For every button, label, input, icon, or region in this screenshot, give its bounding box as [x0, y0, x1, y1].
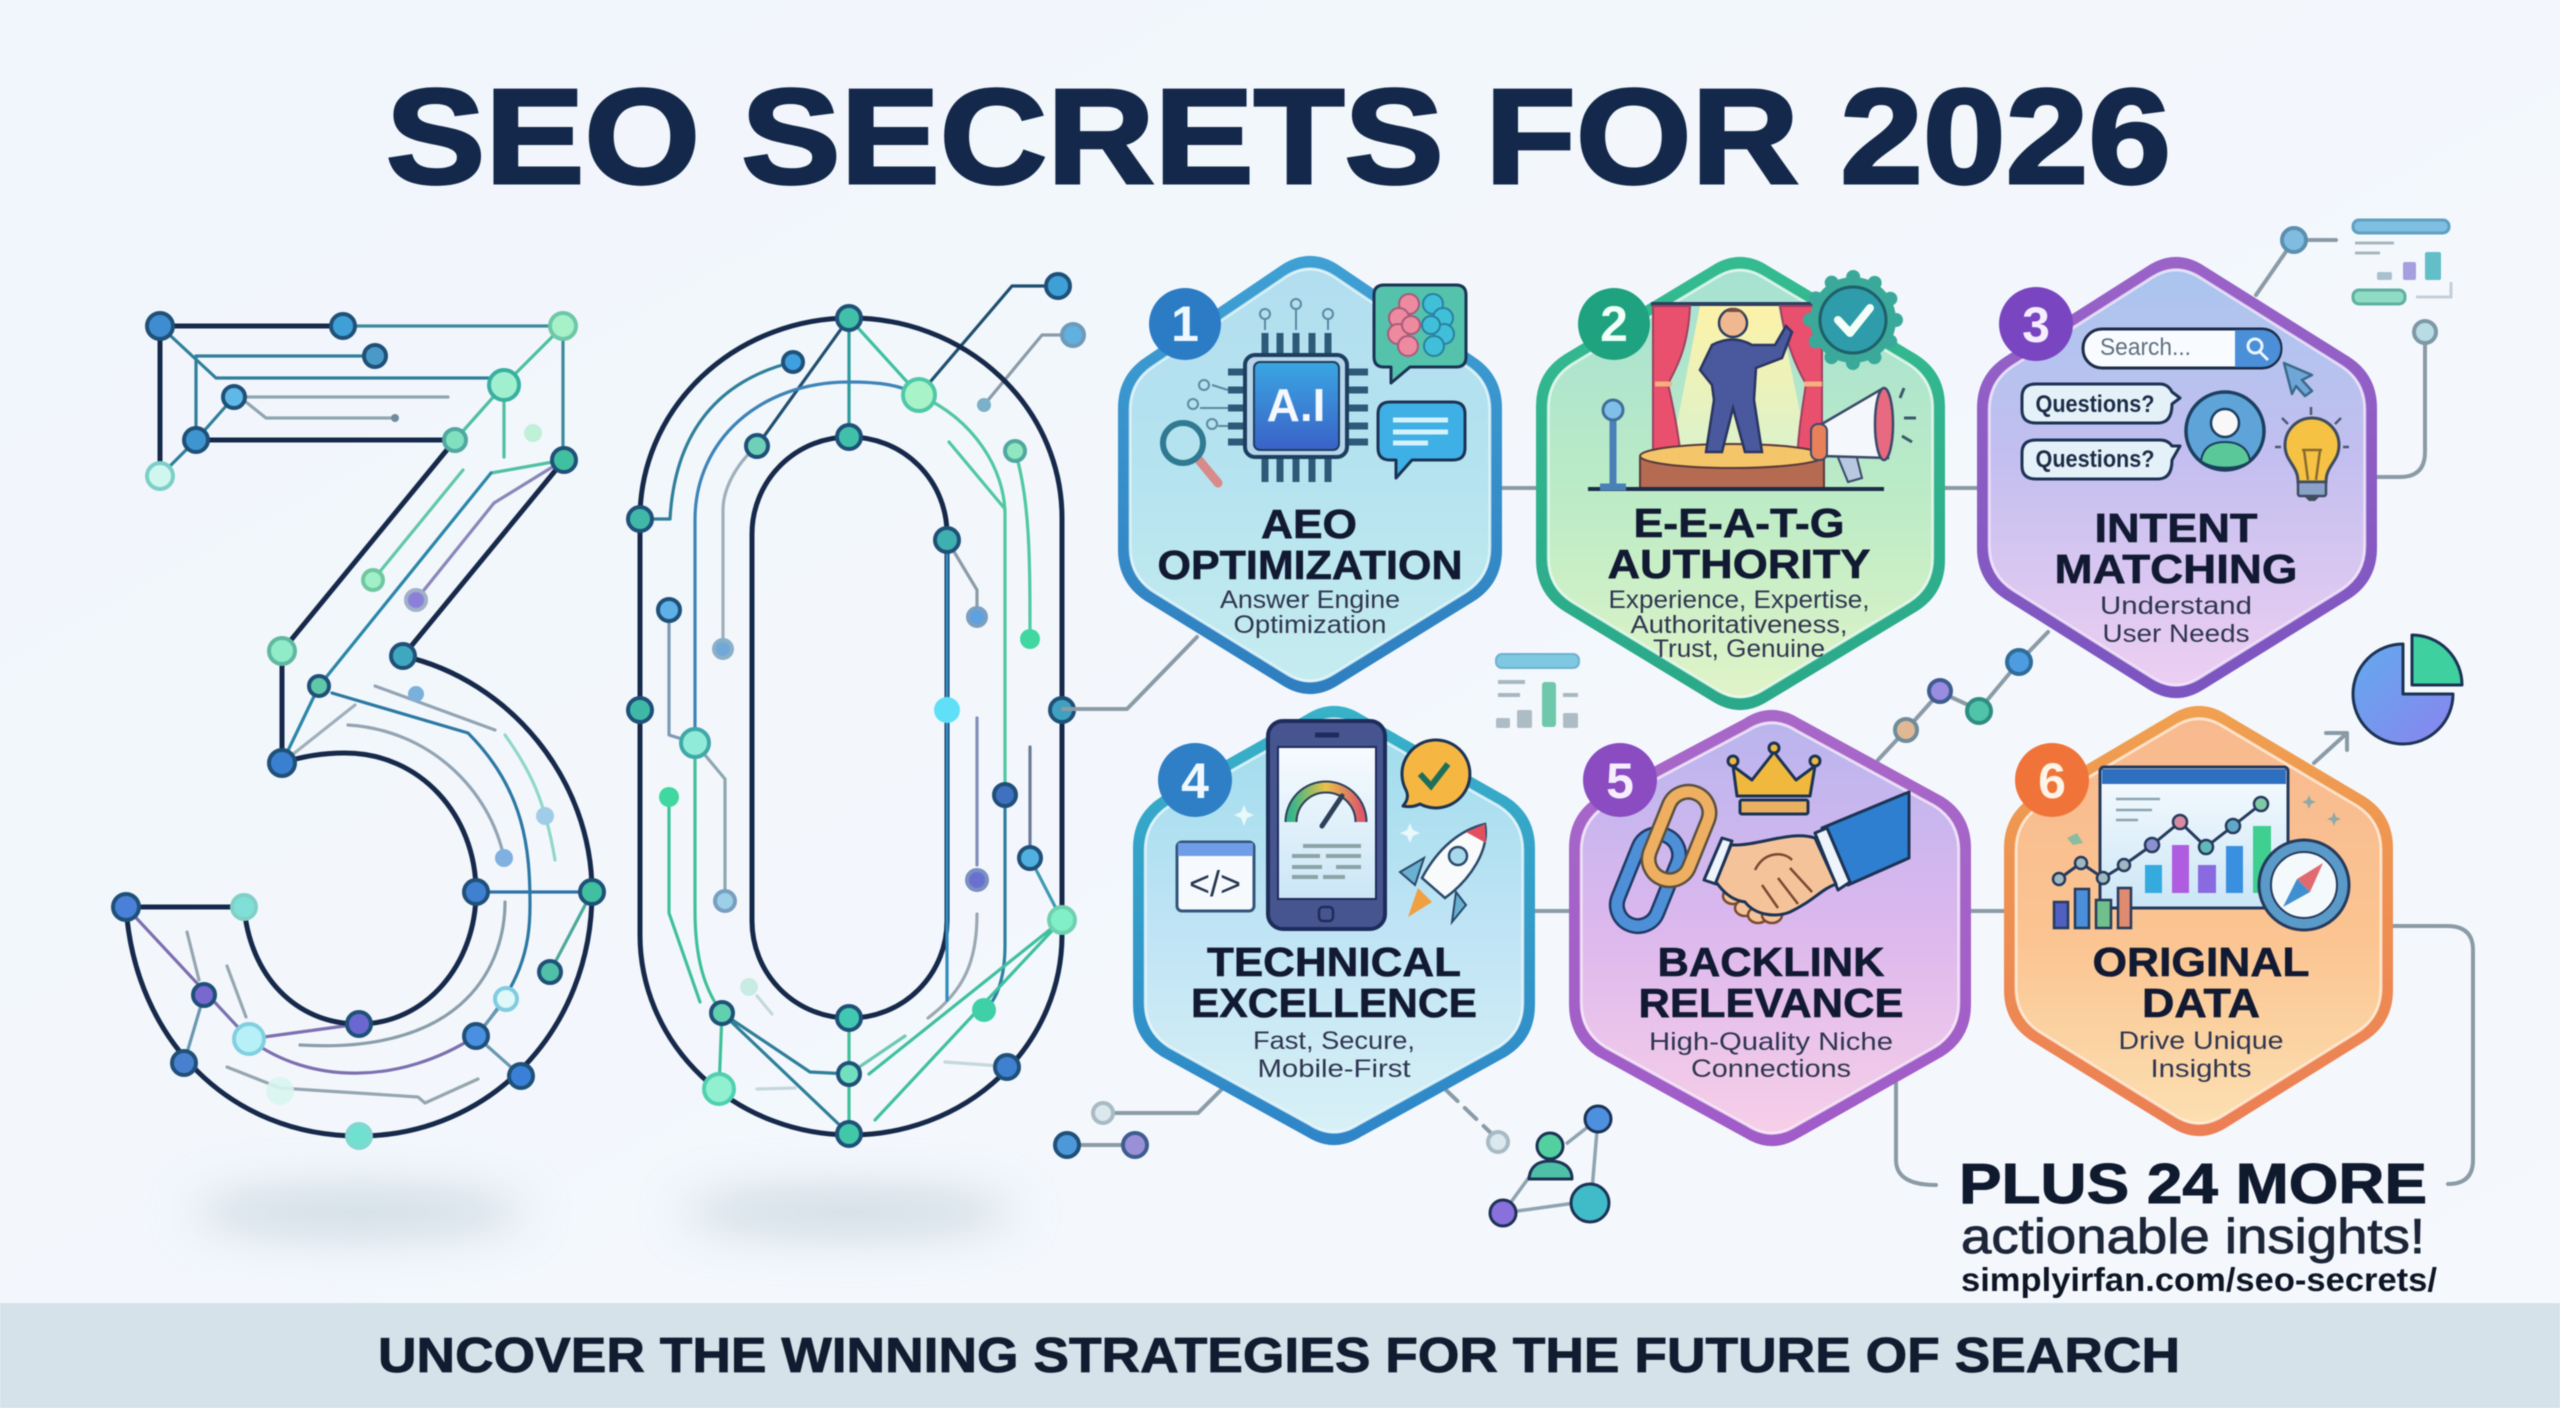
- digit 0 inner right accent: [945, 540, 949, 1000]
- description: Drive Unique: [2118, 1027, 2284, 1055]
- hexagon frame: [1983, 263, 2371, 692]
- description: [1253, 1027, 1415, 1083]
- description: Fast, Secure,: [1253, 1027, 1415, 1055]
- badge 4: 4: [1181, 753, 1209, 809]
- description: Experience, Expertise,: [1608, 586, 1870, 614]
- circuit digit 0: [628, 274, 1084, 1146]
- hexagon frame: [1139, 712, 1529, 1139]
- icon: check bubble: [1402, 740, 1470, 808]
- badge 6: [2015, 743, 2089, 817]
- badge 6: 6: [2038, 753, 2066, 809]
- small connector nodes: [1055, 228, 2436, 1157]
- heading: AUTHORITY: [1608, 541, 1870, 587]
- panel: 1 AEO optimization: [1124, 262, 1496, 688]
- heading: INTENT: [2094, 505, 2258, 551]
- badge 5: [1583, 743, 1657, 817]
- heading: E-E-A-T-G: [1634, 500, 1844, 546]
- badge 5: 5: [1606, 753, 1634, 809]
- digit 0 nodes: [628, 274, 1084, 1146]
- question bubble 2: [2022, 440, 2180, 479]
- description: User Needs: [2102, 620, 2250, 648]
- description: High-Quality Niche: [1649, 1028, 1893, 1056]
- callout: plus 24 more: simplyirfan.com/seo-secrets/: [1961, 1261, 2437, 1298]
- arrow: to pie chart: [2314, 733, 2347, 763]
- panel: 6 original data: [2010, 712, 2387, 1130]
- badge 3: 3: [2022, 297, 2050, 353]
- description: Authoritativeness,: [1630, 611, 1848, 639]
- icon: small bar chart: [2054, 888, 2131, 928]
- icon: analytics window: [2100, 767, 2288, 908]
- digit 3 nodes: [113, 313, 604, 1148]
- hexagon frame: [1124, 262, 1496, 688]
- icon: check badge: [1810, 277, 1896, 363]
- digit 3 outline: [126, 326, 592, 1136]
- badge 1: 1: [1171, 296, 1199, 352]
- inner highlight: [1581, 723, 1959, 1133]
- icon: mini dashboard centre: [1496, 654, 1579, 728]
- panel: 4 technical excellence: [1139, 712, 1529, 1139]
- sparkles: [2302, 795, 2341, 826]
- heading: [1158, 501, 1462, 588]
- question bubble 1: Questions?: [2036, 391, 2154, 418]
- icon: brain bubble: [1374, 285, 1466, 383]
- circuit digit 3: [113, 313, 604, 1148]
- description: Trust, Genuine: [1653, 635, 1825, 663]
- icon: chain links: [1611, 785, 1716, 932]
- icon: code window: </>: [1189, 863, 1241, 904]
- icon: rocket: [1400, 824, 1486, 922]
- inner highlight: [1130, 269, 1490, 681]
- panel: 3 intent matching: [1983, 263, 2371, 692]
- icon: compass: [2259, 840, 2349, 930]
- inner highlight: [1989, 270, 2365, 685]
- digit 3 traces: [126, 326, 592, 1103]
- heading: OPTIMIZATION: [1158, 542, 1462, 588]
- icon: cursor: [2284, 363, 2312, 396]
- question bubble 1: [2022, 384, 2180, 423]
- description: Connections: [1691, 1055, 1851, 1083]
- hexagon frame: [2010, 712, 2387, 1130]
- description: Understand: [2100, 592, 2252, 620]
- connector lines: [1063, 240, 2473, 1185]
- title: SEO SECRETS FOR 2026: [386, 61, 2171, 212]
- description: Optimization: [1234, 611, 1386, 639]
- callout: plus 24 more: PLUS 24 MORE: [1959, 1152, 2427, 1216]
- icon: stage with speaker: [1588, 304, 1884, 489]
- heading: [2092, 939, 2310, 1026]
- inner highlight: [1548, 270, 1933, 697]
- badge 4: [1158, 743, 1232, 817]
- icon: megaphone: [1811, 388, 1916, 482]
- digit 3 upper right outline: [343, 326, 563, 460]
- icon: handshake: [1704, 792, 1909, 923]
- heading: RELEVANCE: [1638, 980, 1904, 1026]
- icon: pie chart: [2353, 635, 2462, 744]
- digit 0 outlines: [640, 318, 1062, 1135]
- search bar: [2083, 329, 2281, 368]
- description: [2100, 592, 2252, 648]
- panel: 2 E-E-A-T-G authority: [1542, 263, 1939, 704]
- icon: magnifier: [1163, 423, 1218, 483]
- line chart: [2053, 797, 2268, 885]
- heading: TECHNICAL: [1207, 939, 1461, 985]
- digit shadows: [189, 1188, 1019, 1236]
- heading: DATA: [2142, 980, 2260, 1026]
- heading: [1191, 939, 1477, 1026]
- description: Mobile-First: [1258, 1055, 1411, 1083]
- icon: light bulb: [2275, 407, 2349, 501]
- icon: user avatar: [2186, 392, 2264, 470]
- inner highlight: [2016, 719, 2381, 1123]
- description: [1608, 586, 1870, 663]
- heading: [2054, 505, 2298, 592]
- heading: EXCELLENCE: [1191, 980, 1477, 1026]
- callout: plus 24 more: [1959, 1152, 2437, 1298]
- hexagon frame: [1542, 263, 1939, 704]
- heading: [1608, 500, 1870, 587]
- heading: [1638, 939, 1904, 1026]
- icon: phone with speed gauge: [1268, 721, 1385, 929]
- heading: ORIGINAL: [2092, 939, 2310, 985]
- question bubble 2: Questions?: [2036, 446, 2154, 473]
- inner highlight: [1145, 719, 1523, 1132]
- icon: people network: [1490, 1106, 1611, 1226]
- description: [1220, 586, 1400, 639]
- icon: AI chip: [1188, 299, 1368, 482]
- hexagon frame: [1575, 716, 1965, 1140]
- description: Insights: [2150, 1055, 2252, 1083]
- search bar: Search...: [2100, 334, 2191, 361]
- badge 2: [1578, 288, 1650, 360]
- icon: mini dashboard top right: [2353, 220, 2451, 304]
- heading: AEO: [1261, 501, 1357, 547]
- badge 1: [1149, 288, 1221, 360]
- digit 0 traces: [640, 286, 1073, 1134]
- icon: code window: [1177, 842, 1254, 911]
- decorative dots: [2067, 833, 2083, 845]
- description: [2118, 1027, 2284, 1083]
- heading: BACKLINK: [1658, 939, 1885, 985]
- footer band: UNCOVER THE WINNING STRATEGIES FOR THE FUTURE OF SEARCH: [378, 1329, 2180, 1383]
- badge 3: [1999, 287, 2073, 361]
- description: [1649, 1028, 1893, 1083]
- footer band: [0, 1303, 2560, 1408]
- heading: MATCHING: [2054, 546, 2298, 592]
- icon: chat bubble: [1378, 402, 1465, 478]
- sparkles: [1234, 805, 1420, 843]
- description: Answer Engine: [1220, 586, 1400, 614]
- digit 0 inner outline: [752, 437, 947, 1018]
- badge 2: 2: [1600, 296, 1628, 352]
- icon: crown: [1728, 743, 1820, 814]
- callout: plus 24 more: actionable insights!: [1961, 1210, 2425, 1264]
- icon: AI chip: A.I: [1267, 379, 1325, 431]
- panel: 5 backlink relevance: [1575, 716, 1965, 1140]
